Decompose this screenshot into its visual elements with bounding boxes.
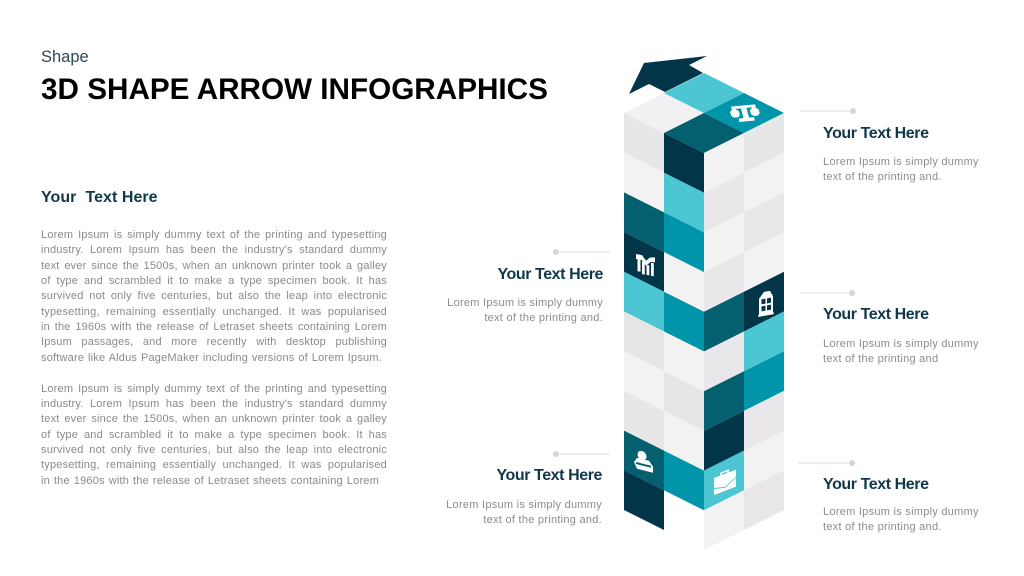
callout text: text of the printing and — [823, 353, 938, 365]
body paragraph 2: of type and scrambled it to make a type specimen book. It has — [41, 429, 387, 441]
body paragraph 1: Lorem Ipsum is simply dummy text of the printing and typesetting — [41, 229, 387, 241]
callout text — [823, 506, 979, 533]
callout text: text of the printing and. — [823, 521, 942, 533]
left heading: Your Text Here — [41, 188, 158, 206]
callout: top right — [823, 125, 979, 183]
body paragraph 2 — [41, 382, 387, 487]
icon: scales — [729, 104, 762, 123]
top face tiles — [624, 73, 784, 153]
icon: bar chart — [636, 254, 655, 276]
callout text — [823, 338, 979, 365]
callout: middle left — [447, 266, 603, 324]
body paragraph 2: typesetting, remaining essentially unchanged. It was popularised — [41, 459, 387, 471]
right face column 4 — [744, 113, 784, 530]
body paragraph 1: Ipsum passages, and more recently with desktop publishing — [41, 336, 387, 348]
callout: middle right — [823, 306, 979, 365]
callout heading: Your Text Here — [823, 306, 929, 323]
left face column 1 — [624, 113, 664, 530]
callout text: Lorem Ipsum is simply dummy — [823, 506, 979, 518]
body paragraph 1: industry. Lorem Ipsum has been the industry's standard dummy — [41, 244, 387, 256]
body paragraph 1: survived not only five centuries, but also the leap into electronic — [41, 290, 387, 302]
body paragraph 1: in the 1960s with the release of Letraset sheets containing Lorem — [41, 321, 387, 333]
callout text — [446, 498, 602, 526]
body paragraph 2: in the 1960s with the release of Letraset sheets containing Lorem — [41, 475, 379, 487]
right face column 3 — [704, 133, 744, 550]
body paragraph 2: industry. Lorem Ipsum has been the industry's standard dummy — [41, 398, 387, 410]
arrow head — [629, 56, 707, 94]
body paragraph 1: software like Aldus PageMaker including versions of Lorem Ipsum. — [41, 352, 382, 364]
callout text: Lorem Ipsum is simply dummy — [446, 498, 602, 510]
title: 3D SHAPE ARROW INFOGRAPHICS — [41, 73, 548, 106]
callout text — [447, 297, 603, 324]
body paragraph 1: text ever since the 1500s, when an unknown printer took a galley — [41, 260, 387, 272]
callout heading: Your Text Here — [496, 467, 602, 484]
callout text — [823, 156, 979, 183]
callout text: Lorem Ipsum is simply dummy — [823, 156, 979, 168]
callout text: text of the printing and. — [484, 312, 603, 324]
body paragraph 2: survived not only five centuries, but also the leap into electronic — [41, 444, 387, 456]
body paragraph 2: text ever since the 1500s, when an unknown printer took a galley — [41, 413, 387, 425]
callout text: Lorem Ipsum is simply dummy — [823, 338, 979, 350]
body paragraph 1: of type and scrambled it to make a type specimen book. It has — [41, 275, 387, 287]
callout: bottom right — [823, 476, 979, 533]
icon: briefcase — [714, 467, 736, 495]
left face column 2 — [664, 133, 704, 510]
callout: bottom left — [446, 467, 602, 526]
callout text: Lorem Ipsum is simply dummy — [447, 297, 603, 309]
callout text: text of the printing and. — [483, 514, 602, 526]
callout heading: Your Text Here — [823, 476, 929, 493]
callout heading: Your Text Here — [497, 266, 603, 283]
callout heading: Your Text Here — [823, 125, 929, 142]
callout text: text of the printing and. — [823, 171, 942, 183]
subtitle: Shape — [41, 48, 89, 66]
body paragraph 1: typesetting, remaining essentially unchanged. It was popularised — [41, 306, 387, 318]
icon: person at desk — [634, 449, 653, 473]
body paragraph 2: Lorem Ipsum is simply dummy text of the printing and typesetting — [41, 382, 387, 394]
body paragraph 1 — [41, 229, 387, 364]
icon: building — [758, 290, 774, 317]
